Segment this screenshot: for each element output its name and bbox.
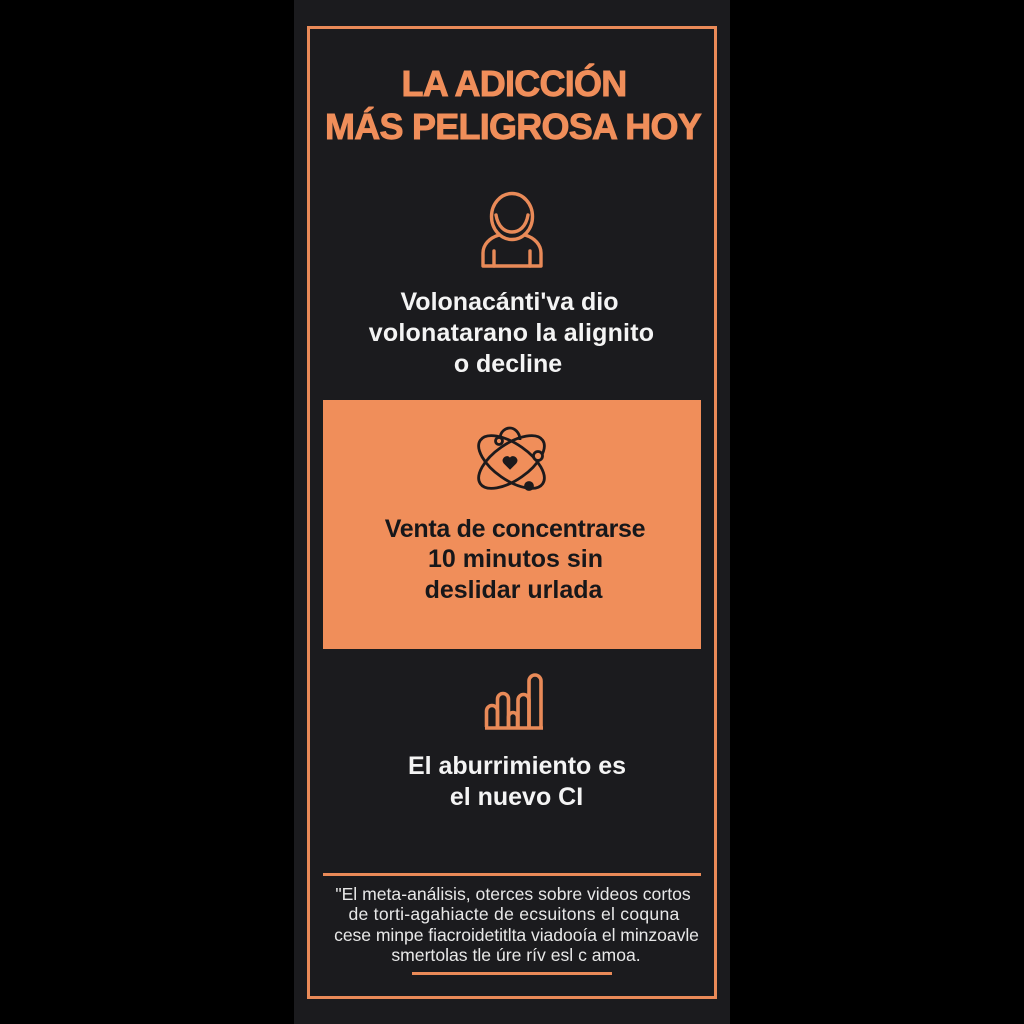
text block: quote: de torti-agahiacte de ecsuitons el coquna	[348, 904, 680, 924]
title	[325, 63, 702, 147]
text block: first statement: Volonacánti'va dio	[400, 288, 619, 316]
text block: quote: cese minpe fiacroidetitlta viadooía el minzoavle	[334, 925, 699, 945]
text block: first statement: volonatarano la alignito	[369, 319, 654, 347]
text block: highlighted statement: Venta de concentrarse	[385, 515, 645, 543]
icon: bar chart	[484, 673, 543, 730]
text block: quote	[334, 884, 699, 965]
divider below quote	[412, 972, 612, 975]
orange outer frame	[307, 26, 717, 999]
text block: highlighted statement: 10 minutos sin	[428, 545, 603, 573]
text block: third statement: El aburrimiento es	[408, 752, 626, 780]
divider above quote	[323, 873, 701, 876]
text block: quote: "El meta-análisis, oterces sobre videos cortos	[335, 884, 691, 904]
title: LA ADICCIÓN	[401, 63, 627, 104]
panel: highlighted orange block	[323, 400, 701, 649]
text block: third statement	[408, 752, 626, 811]
text block: highlighted statement	[385, 515, 645, 604]
dark poster panel	[294, 0, 730, 1024]
text block: quote: smertolas tle úre rív esl c amoa.	[391, 945, 641, 965]
icon: atom with heart	[477, 426, 546, 491]
text block: third statement: el nuevo CI	[450, 783, 583, 811]
title: MÁS PELIGROSA HOY	[325, 106, 701, 147]
text block: first statement: o decline	[454, 350, 562, 378]
text block: first statement	[368, 288, 654, 378]
icon: person	[481, 192, 543, 268]
text block: highlighted statement: deslidar urlada	[425, 576, 602, 604]
